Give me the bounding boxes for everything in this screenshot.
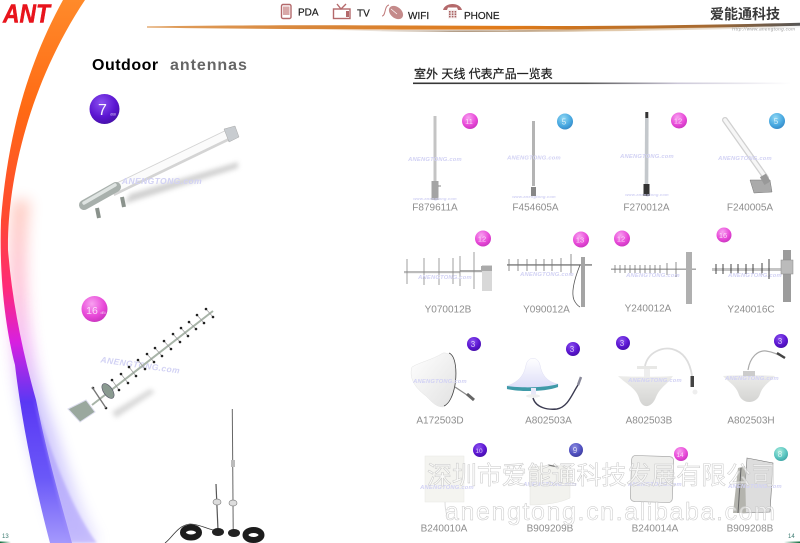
row 1: omni antennas [407, 112, 785, 214]
label: F454605A: F454605A [512, 202, 559, 214]
page number: 13 [0, 534, 11, 543]
section heading: 室外天线: 室外 天线 代表产品一览表 [414, 66, 553, 81]
label: B909208B: B909208B [727, 524, 774, 534]
product: F270012A [619, 112, 674, 197]
badge: 12: 12 [617, 234, 625, 244]
label: A802503H: A802503H [727, 416, 775, 426]
label: A172503D: A172503D [416, 416, 464, 426]
short whip ring [213, 499, 221, 505]
badge: 16 dBi large: 16 [86, 305, 98, 317]
heading: Outdoor antennas: Outdoor [92, 57, 159, 74]
swoosh: coloured side band [1, 0, 100, 543]
label: F879611A: F879611A [412, 202, 458, 214]
badge: 11: 11 [465, 117, 473, 126]
badge: 12 [475, 230, 491, 246]
label: B909209B: B909209B [527, 524, 574, 534]
heading underline [413, 82, 791, 84]
short whip [216, 484, 218, 530]
product: F454605A [506, 121, 561, 199]
product: A802503A [507, 358, 581, 409]
label: WIFI: WIFI [408, 11, 429, 22]
header rule [147, 23, 800, 32]
product: F270012A: www.anengtong.com [625, 192, 669, 197]
badge: 12 [614, 230, 630, 246]
watermark: large omni: ANENGTONG.com [121, 176, 202, 186]
bases [212, 528, 240, 537]
watermark: ANENGTONG.com [99, 354, 181, 376]
badge: 10: 10 [475, 448, 483, 455]
product: B240014A [627, 455, 682, 503]
product: A802503H [723, 351, 785, 402]
badge: 16 dBi large [82, 296, 108, 322]
tall whip [231, 409, 234, 530]
label: TV: TV [357, 8, 370, 20]
badge: 3: 3 [620, 339, 625, 348]
product: Y240012A [611, 252, 696, 304]
product: F454605A: ANENGTONG.com [506, 156, 561, 162]
product: B909208B: ANENGTONG.com [727, 484, 782, 490]
product: B240010A [419, 456, 474, 520]
label: Y070012B: Y070012B [425, 304, 472, 316]
product: Y240016C: ANENGTONG.com [727, 273, 782, 279]
icon: PDA [282, 4, 291, 18]
cable coils [183, 528, 262, 540]
label: B240014A: B240014A [632, 524, 679, 534]
label: Y090012A: Y090012A [523, 304, 570, 316]
watermark: company name: 深圳市爱能通科技发展有限公司 [427, 462, 776, 490]
page number: 14 [784, 534, 800, 543]
cable [165, 524, 213, 543]
icon: WIFI mouse [382, 3, 406, 22]
heading: Outdoor antennas: antennas [170, 57, 248, 74]
badge: 3: 3 [570, 345, 575, 354]
watermark: store URL: anengtong.cn.alibaba.com [445, 498, 775, 526]
row 2: Yagi antennas [404, 228, 793, 316]
label: Y240016C: Y240016C [727, 304, 775, 316]
dipole [92, 387, 106, 408]
badge: 7 dBi [90, 94, 120, 124]
product: Y240012A: ANENGTONG.com [625, 273, 680, 279]
product: F454605A: www.anengtong.com [512, 194, 556, 199]
product: F270012A: ANENGTONG.com [619, 154, 674, 160]
badge: 13 [573, 232, 589, 248]
badge: 3 [774, 334, 788, 348]
badge: 14: 14 [676, 452, 684, 459]
icon: PHONE [443, 4, 462, 18]
product: magnetic mount antennas [165, 409, 262, 543]
badge: 3: 3 [778, 337, 783, 346]
badge: 3: 3 [471, 340, 476, 349]
shadow [124, 162, 238, 204]
product: B909209B [522, 465, 577, 505]
badge: 13: 13 [576, 236, 584, 244]
product: Y240016C [712, 250, 793, 302]
element tips [92, 308, 214, 409]
label: A802503B: A802503B [626, 416, 673, 426]
label: F240005A: F240005A [727, 202, 773, 214]
badge: 16 dBi large: dBi [100, 311, 106, 315]
mount plate [68, 400, 95, 422]
product: large Yagi antenna [68, 308, 214, 422]
mount highlight [84, 185, 115, 203]
tube edge [112, 135, 228, 191]
badge: 5: 5 [774, 117, 779, 126]
product: A172503D: ANENGTONG.com [412, 379, 467, 385]
disc [99, 381, 117, 401]
boom [92, 311, 213, 405]
product: F240005A [717, 120, 772, 193]
badge: 8: 8 [778, 450, 783, 459]
badge: 12: 12 [674, 116, 682, 126]
product: A802503B: ANENGTONG.com [627, 378, 682, 384]
shadow [112, 389, 155, 418]
brand name: 爱能通科技 [710, 6, 780, 22]
badge: 9 [569, 443, 583, 457]
product: B240010A: ANENGTONG.com [419, 485, 474, 491]
metal mount [84, 187, 116, 205]
badge: 16 [716, 228, 732, 242]
product: F879611A: www.anengtong.com [413, 196, 457, 201]
tall whip coil [231, 460, 235, 467]
product: large omni antenna [84, 126, 239, 218]
product: Y090012A [507, 254, 592, 307]
product: Y070012B [404, 252, 492, 291]
tall whip ring [229, 500, 237, 506]
page number: 14: 14 [788, 534, 795, 540]
product: F879611A [407, 116, 462, 201]
badge: 3 [616, 336, 630, 350]
badge: 14 [674, 447, 688, 461]
product: A802503B [618, 349, 698, 406]
badge: 9: 9 [573, 446, 578, 455]
badge: 16: 16 [719, 231, 727, 240]
product: B240014A: ANENGTONG.com [627, 482, 682, 488]
page number: 13: 13 [2, 534, 9, 540]
product: B909209B: ANENGTONG.com [522, 482, 577, 488]
badge: 5: 5 [562, 118, 567, 126]
label: Y240012A: Y240012A [625, 304, 672, 314]
elements [112, 309, 213, 390]
badge: 10 [473, 443, 487, 457]
badge: 12 [671, 112, 687, 128]
badge: 11 [462, 113, 478, 129]
label: B240010A: B240010A [421, 524, 468, 534]
product: F240005A: ANENGTONG.com [717, 156, 772, 162]
badge: 12: 12 [478, 234, 486, 244]
label: F270012A: F270012A [623, 202, 670, 214]
badge: 7 dBi: 7 [98, 102, 107, 119]
product: B909208B [727, 458, 782, 513]
product: Y090012A: ANENGTONG.com [519, 272, 574, 278]
badge: 5 [557, 114, 573, 130]
row 3: ceiling antennas [411, 334, 788, 426]
badge: 5 [769, 113, 785, 129]
row 4: panel antennas [419, 443, 788, 534]
nav: device categories [282, 3, 500, 22]
tube highlight [112, 134, 228, 190]
clamps [97, 197, 124, 218]
badge: 7 dBi: dBi [110, 112, 116, 116]
product: F879611A: ANENGTONG.com [407, 157, 462, 163]
badge: 8 [774, 447, 788, 461]
product: A802503H: ANENGTONG.com [724, 376, 779, 382]
brand URL: Http://www.anengtong.com [732, 26, 795, 32]
cap [224, 126, 239, 142]
label: PHONE: PHONE [464, 11, 500, 22]
label: PDA: PDA [298, 8, 319, 18]
badge: 3 [566, 342, 580, 356]
label: A802503A: A802503A [525, 416, 572, 426]
icon: TV [334, 4, 350, 18]
product: A172503D [411, 353, 474, 407]
product: Y070012B: ANENGTONG.com [417, 275, 472, 281]
badge: 3 [467, 337, 481, 351]
